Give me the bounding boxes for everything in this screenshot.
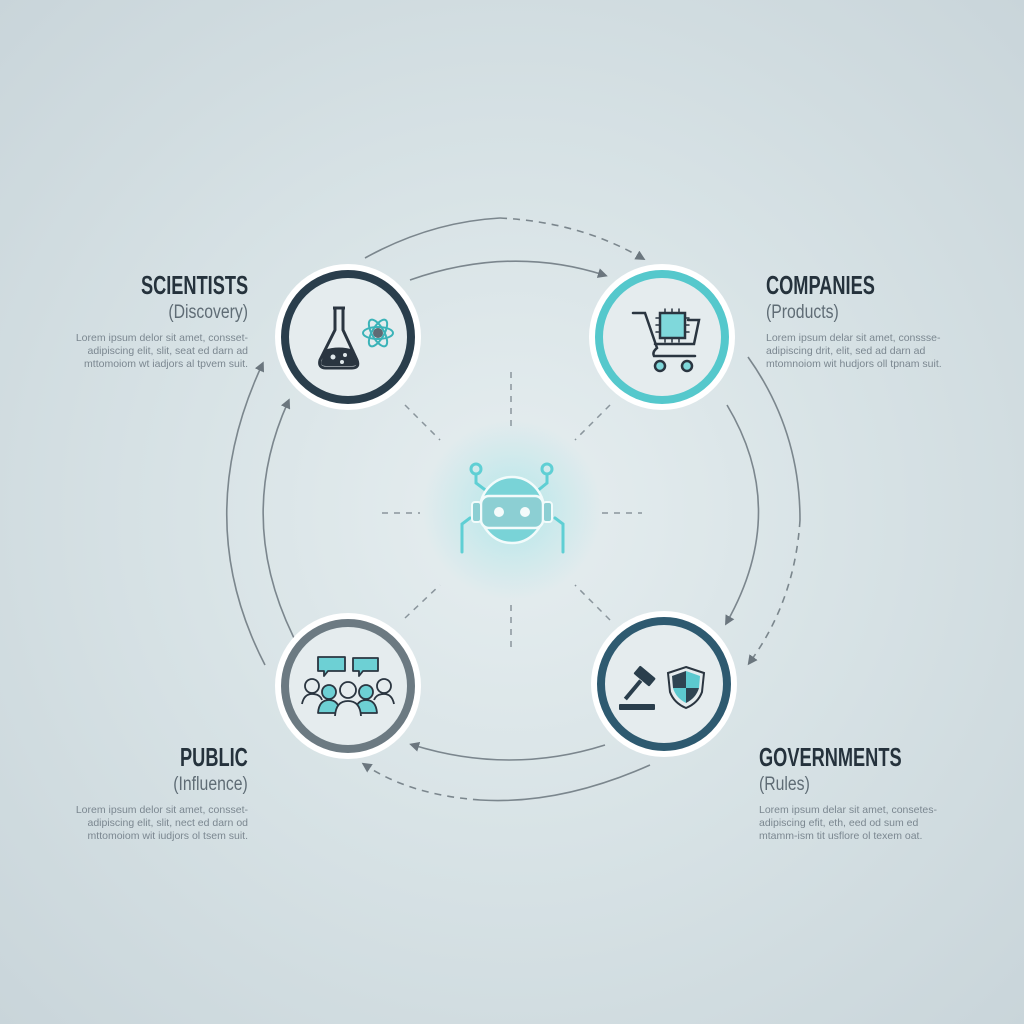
- text block: scientists: adipiscing elit, slit, seat ed darn ad: [87, 345, 248, 357]
- text block: scientists: [76, 270, 248, 370]
- text block: public: PUBLIC: [180, 742, 248, 772]
- text block: scientists: SCIENTISTS: [141, 270, 248, 300]
- icon: flask and atom: [320, 308, 393, 368]
- text block: companies: adipiscing drit, elit, sed ad darn ad: [766, 345, 925, 357]
- text block: companies: mtomnoiom wit hudjors oll tpnam suit.: [766, 358, 942, 370]
- text block: companies: (Products): [766, 302, 839, 323]
- text block: governments: Lorem ipsum delar sit amet, consetes-: [759, 804, 937, 816]
- node: governments: [591, 611, 737, 757]
- arrows: cycle arcs: [227, 218, 800, 801]
- node: companies: [589, 264, 735, 410]
- text block: public: adipiscing elit, slit, nect ed darn od: [87, 817, 248, 829]
- text block: public: (Influence): [173, 774, 248, 795]
- text block: companies: Lorem ipsum delar sit amet, conssse-: [766, 332, 940, 344]
- icon: people with speech bubbles: [302, 657, 394, 716]
- text block: companies: [766, 270, 942, 370]
- text block: scientists: (Discovery): [168, 302, 248, 323]
- text block: public: Lorem ipsum delor sit amet, consset-: [76, 804, 248, 816]
- text block: public: [76, 742, 248, 842]
- text block: governments: [759, 742, 937, 842]
- node: scientists: [275, 264, 421, 410]
- text block: scientists: Lorem ipsum delor sit amet, consset-: [76, 332, 248, 344]
- node: public: [275, 613, 421, 759]
- text block: public: mttomoiom wit iudjors ol tsem suit.: [88, 830, 248, 842]
- dashed rays: [382, 372, 642, 650]
- text block: governments: GOVERNMENTS: [759, 742, 902, 772]
- icon: gavel and shield: [617, 664, 704, 710]
- text block: governments: adipiscing efit, eth, eed od sum ed: [759, 817, 918, 829]
- icon: cart with chip: [633, 309, 699, 371]
- text block: governments: (Rules): [759, 774, 810, 795]
- icon: central robot: [422, 420, 602, 600]
- text block: scientists: mttomoiom wt iadjors al tpvem suit.: [84, 358, 248, 370]
- text block: governments: mtamm-ism tit usflore ol texem oat.: [759, 830, 922, 842]
- text block: companies: COMPANIES: [766, 270, 875, 300]
